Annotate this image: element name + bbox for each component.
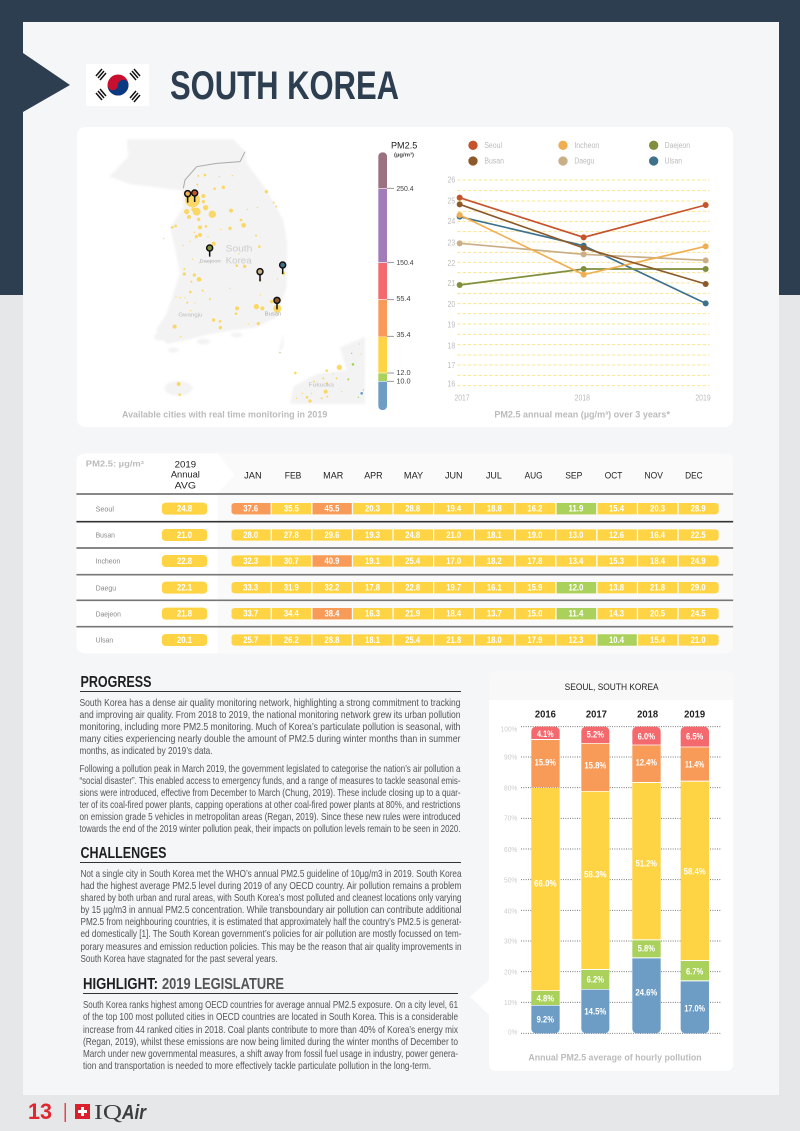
table header: JUL [486,471,502,481]
line chart: PM2.5 annual mean: 20 [447,300,456,309]
table header: 2019 [175,460,196,470]
row: Daegu: 15.9 [527,584,543,593]
text: challenges: had the highest average PM2.5 level during 2019 of any OECD country. Air pollution remains a problem [80,881,462,892]
text: progress: “social disaster”. This enabled access to emergency funds, and a range of measures to tackle seasonal emis- [80,776,460,787]
row: Incheon [96,555,719,567]
text: challenges: PM2.5 from neighbouring countries, it is estimated that approximately half the country’s PM2.5 is generat- [80,917,462,928]
row: Ulsan: 20.1 [177,636,192,646]
table header: JAN [244,471,262,481]
row: Busan: 24.8 [405,531,420,541]
text: challenges: by 15 µg/m3 in annual PM2.5 concentration. While transboundary air pollution can contribute additional [80,905,462,916]
row: Incheon: 40.9 [324,557,340,567]
chart legend: Busan [484,157,504,166]
chart legend: Daejeon [665,141,690,150]
row: Busan: 28.0 [243,531,258,541]
footer: page number and logo: IQ [94,1100,122,1124]
row: Ulsan: 21.0 [691,636,706,646]
panel: Seoul stacked bar chart: 20% [504,968,517,977]
row: Seoul: 37.6 [243,505,258,514]
text: highlight: South Korea ranks highest among OECD countries for average annual PM2.5 exposure. On a city level, 61 [83,1000,458,1011]
bar: 2019: 17.0% [684,1003,705,1013]
text: progress: months, as indicated by 2019’s data. [80,746,212,757]
bar: 2019: 6.7% [686,966,703,976]
text: progress: many cities experiencing nearly double the amount of PM2.5 during winter months than in summer [80,734,461,745]
bar: 2016 [531,710,560,1033]
table header: JUN [445,471,462,481]
text: challenges: porary measures and emission reduction policies. This may be the reason that air quality improvements in [80,942,462,953]
row: Daegu [96,582,719,594]
series: Ulsan [457,214,709,306]
row: Busan: 12.6 [609,531,624,541]
heading: highlight: HIGHLIGHT: [83,976,158,993]
row: Daejeon: 21.8 [177,610,192,619]
bar: 2018: 24.6% [635,988,657,998]
row: Daegu: 22.1 [177,584,192,593]
map of South Korea: South [226,244,252,254]
map of South Korea: Daejeon [200,259,221,265]
row: Daegu: 22.8 [405,584,420,593]
row: Daejeon: 18.4 [446,610,461,619]
row: Ulsan: 12.3 [568,636,584,646]
row: Daejeon: 38.4 [324,610,340,619]
bar: 2019: 2019 [684,710,706,721]
row: Incheon: 19.1 [365,557,380,567]
panel: Seoul stacked bar chart: 90% [504,753,517,762]
bar: 2017: 15.8% [584,761,606,771]
row: Ulsan: 18.0 [487,636,502,646]
bar: 2016: 66.0% [534,879,557,889]
row: Seoul: 15.4 [609,505,624,514]
PM2.5 colour scale: 250.4 [396,184,414,193]
chart legend: Incheon [574,141,599,150]
heading: highlight: 2019 LEGISLATURE [162,976,284,993]
table header: PM2.5: µg/m³ [86,460,144,469]
panel: Seoul stacked bar chart: Annual PM2.5 average of hourly pollution [528,1053,702,1063]
row: Incheon: 32.3 [243,557,258,567]
row: Daegu: 17.8 [365,584,380,593]
series: Daegu [457,240,709,263]
PM2.5 colour scale: PM2.5 [391,140,417,150]
table header: MAR [323,471,343,481]
text: challenges: South Korea have stagnated for the past several years. [80,954,278,965]
chart legend: Daegu [574,157,594,166]
text: highlight: increase from 44 ranked cities in 2018. Coal plants contribute to more than 40% of Korea’s energy mix [83,1025,458,1036]
row: Busan [96,529,719,541]
map of South Korea: Busan [265,312,281,318]
row: Incheon: 30.7 [284,557,299,567]
panel: Seoul stacked bar chart: 40% [504,906,517,915]
row: Busan: 13.0 [568,531,584,541]
row: Seoul: 16.2 [527,505,543,514]
line chart: PM2.5 annual mean: 25 [447,197,456,206]
bar: 2019 [681,710,709,1033]
row: Seoul: 28.8 [405,505,420,514]
panel: Seoul stacked bar chart: SEOUL, SOUTH KOREA [565,682,659,692]
row: Busan: 27.8 [284,531,299,541]
panel: Seoul stacked bar chart: 80% [504,784,517,793]
panel: Seoul stacked bar chart: 70% [504,814,517,823]
bar: 2018: 2018 [637,710,659,721]
line chart: PM2.5 annual mean: 24 [447,217,456,226]
table header: Annual [171,471,200,480]
row: Daegu: 33.3 [243,584,258,593]
text: progress: Following a pollution peak in March 2019, the government legislated to categorise the nation’s air pollution a [80,764,461,775]
row: Daejeon [96,608,719,620]
row: Seoul: 28.9 [691,505,706,514]
text: progress: monitoring, including more PM2.5 monitoring. Much of Korea’s particulate pollution is seasonal, with [80,722,460,733]
map of South Korea: Available cities with real time monitoring in 2019 [122,410,327,420]
row: Daegu: 12.0 [568,584,584,593]
row: Ulsan: 17.9 [527,636,543,646]
bar: 2016: 4.1% [537,729,554,739]
row: Daegu: 19.7 [446,584,461,593]
text: progress: towards the end of the 2019 winter pollution peak, their impacts on pollution levels remain to be seen in 2020. [80,824,460,835]
text: highlight: tion and transportation is needed to more effectively tackle particulate pollution in the long-term. [83,1061,431,1072]
bar: 2017: 5.2% [587,729,604,739]
panel: Seoul stacked bar chart: 10% [504,998,517,1007]
bar: 2018: 12.4% [636,757,657,767]
table header: NOV [645,471,663,481]
line chart: PM2.5 annual mean: 23 [447,239,456,248]
row: Busan: 18.1 [487,531,502,541]
bar: 2017: 58.3% [584,869,607,879]
table header [86,460,703,491]
bar: 2019: 11.4% [685,759,704,769]
title: SOUTH KOREA [170,64,399,108]
text: highlight [83,1000,458,1072]
bar: 2018 [632,710,661,1033]
row: Ulsan: 10.4 [609,636,624,646]
table header: OCT [605,471,623,481]
PM2.5 colour scale: 12.0 [396,368,411,377]
line chart: PM2.5 annual mean: 19 [447,321,456,330]
icon: South Korea flag [86,64,149,106]
heading: highlight [83,976,458,994]
heading: progress: PROGRESS [80,674,152,691]
row: Seoul: 20.3 [365,505,380,514]
row: Busan: 19.0 [527,531,543,541]
panel: map and line chart [77,127,733,427]
PM2.5 colour scale: 35.4 [396,330,411,339]
row: Daejeon: 20.5 [650,610,665,619]
line chart: PM2.5 annual mean: 2017 [454,394,470,403]
row: Incheon: 25.4 [405,557,420,567]
panel: Seoul stacked bar chart: 60% [504,845,517,854]
text: challenges: Not a single city in South Korea met the WHO’s annual PM2.5 guideline of 10µg/m3 in 2019. South Korea [80,869,462,880]
PM2.5 colour scale [378,140,417,410]
footer: page number and logo: 13 [28,1099,52,1124]
footer: page number and logo [28,1099,147,1124]
bar: 2017: 2017 [586,710,607,721]
bar: 2019: 58.4% [684,867,706,877]
text: challenges: ed domestically [1]. The South Korean government’s policies for air pollution are mostly focussed on tem- [80,929,462,940]
row: Daejeon: 24.5 [691,610,706,619]
panel: Seoul stacked bar chart [470,671,733,1071]
row: Busan: 29.6 [324,531,340,541]
series: Busan [457,201,709,287]
row: Seoul: 45.5 [324,505,340,514]
map of South Korea [109,139,365,420]
table header: DEC [685,471,703,481]
row: Daegu: Daegu [96,583,116,592]
map pins [185,190,286,309]
row: Daegu: 29.0 [691,584,706,593]
row: Daejeon: 16.3 [365,610,380,619]
text: highlight: (Regan, 2019), whilst these emissions are now being limited during the winter months of December to [83,1037,458,1048]
row: Incheon: Incheon [96,557,121,565]
row: Ulsan: 21.8 [446,636,461,646]
table header: AUG [525,471,543,481]
text: highlight: March under new governmental measures, a shift away from fossil fuel usage in industry, power genera- [83,1049,458,1060]
chart legend [468,141,690,166]
row: Ulsan [96,634,719,646]
row: Daejeon: 15.0 [527,610,543,619]
text: progress: South Korea has a dense air quality monitoring network, highlighting a strong commitment to tracking [80,698,461,709]
line chart: PM2.5 annual mean: 2019 [695,394,711,403]
text: challenges [80,869,462,965]
line chart: PM2.5 annual mean [447,141,711,419]
row: Daegu: 16.1 [487,584,502,593]
row: Busan: 21.0 [446,531,461,541]
bar: 2016: 2016 [535,710,556,721]
row: Incheon: 17.8 [527,557,543,567]
row: Busan: 22.5 [691,531,706,541]
row: Incheon: 15.3 [609,557,624,567]
row: Incheon: 24.9 [691,557,706,567]
row: Incheon: 17.0 [446,557,461,567]
text: highlight: of the top 100 most polluted cities in OECD countries are located in South Korea. This is a considerable [83,1012,458,1023]
row: Busan: 21.0 [177,531,192,541]
heading: challenges: CHALLENGES [80,845,166,862]
bar: 2017: 6.2% [587,974,604,984]
row: Seoul [96,503,719,515]
line chart: PM2.5 annual mean: 2018 [575,394,590,403]
map of South Korea: Korea [226,256,252,266]
map of South Korea: Gwangju [178,313,202,319]
row: Seoul: 19.4 [446,505,461,514]
bar: 2017 [581,710,609,1033]
text: progress: sions were introduced, effective from December to March (Chung, 2019). These include closing up to a quar- [80,788,460,799]
row: Daejeon: 34.4 [284,610,299,619]
row: Daejeon: 14.3 [609,610,624,619]
line chart: PM2.5 annual mean: PM2.5 annual mean (µg/m³) over 3 years* [494,409,670,419]
row: Ulsan: 26.2 [284,636,299,646]
line chart: PM2.5 annual mean: 18 [447,341,456,350]
row: Seoul: Seoul [96,504,114,513]
series: Seoul [457,195,709,240]
line chart: PM2.5 annual mean: 21 [447,279,456,288]
row: Daejeon: Daejeon [96,610,121,618]
row: Busan: 19.3 [365,531,380,541]
text: challenges: shared by both urban and rural areas, with South Korea’s most polluted and cleanest locations only varying [80,893,462,904]
header arrow [23,53,70,112]
bar: 2018: 51.2% [636,859,657,869]
line chart: PM2.5 annual mean: 17 [447,361,456,370]
row: Incheon: 22.8 [177,557,192,567]
text: progress: and improving air quality. From 2018 to 2019, the national monitoring network grew its urban pollution [80,710,460,721]
row: Ulsan: Ulsan [96,636,113,644]
row: Daegu: 32.2 [324,584,340,593]
table: monthly PM2.5 by city [76,453,733,653]
PM2.5 colour scale: 10.0 [396,377,411,386]
row: Daejeon: 13.7 [487,610,502,619]
line chart: PM2.5 annual mean: 22 [447,259,456,268]
row: Ulsan: 15.4 [650,636,665,646]
row: Ulsan: 28.8 [324,636,340,646]
bar: 2016: 15.9% [535,758,556,768]
bar: 2016: 9.2% [537,1015,554,1025]
line chart: PM2.5 annual mean: 26 [447,176,456,185]
table header: AVG [175,481,196,491]
text: progress: ter of its coal-fired power plants, capping operations at other coal-fired power plants at 80%, and restrictions [80,800,460,811]
row: Busan: 16.4 [650,531,665,541]
row: Ulsan: 25.4 [405,636,420,646]
PM2.5 colour scale: 55.4 [396,294,411,303]
row: Incheon: 18.2 [487,557,502,567]
row: Busan: Busan [96,531,115,539]
series: Incheon [457,212,709,278]
bar: 2016: 4.8% [537,993,554,1003]
chart legend: Seoul [484,141,502,150]
bar: 2019: 6.5% [686,732,703,742]
row: Seoul: 24.8 [177,505,192,514]
table header: MAY [404,471,423,481]
row: Incheon: 13.4 [568,557,584,567]
bar: 2017: 14.5% [584,1007,606,1017]
row: Ulsan: 25.7 [243,636,258,646]
series: Daejeon [457,266,709,288]
row: Seoul: 18.8 [487,505,502,514]
row: Ulsan: 18.1 [365,636,380,646]
panel: Seoul stacked bar chart: 0% [508,1028,517,1037]
row: Daejeon: 21.9 [405,610,420,619]
panel: Seoul stacked bar chart: 50% [504,876,517,885]
map of South Korea: Fukuoka [309,383,335,389]
row: Seoul: 20.3 [650,505,665,514]
row: Seoul: 35.5 [284,505,299,514]
row: Daegu: 21.8 [650,584,665,593]
PM2.5 colour scale: (µg/m³) [394,153,414,159]
chart legend: Ulsan [665,157,682,166]
row: Incheon: 18.4 [650,557,665,567]
panel: Seoul stacked bar chart: 100% [501,724,517,733]
bar: 2018: 6.0% [638,732,655,742]
row: Daejeon: 33.7 [243,610,258,619]
row: Daegu: 31.9 [284,584,299,593]
PM2.5 colour scale: 150.4 [396,258,414,267]
line chart: PM2.5 annual mean: 16 [447,380,456,389]
text: progress: on emission grade 5 vehicles in metropolitan areas (Regan, 2019). Since these new rules were introduced [80,812,461,823]
table header: SEP [565,471,582,481]
row: Daegu: 13.8 [609,584,624,593]
row: Daejeon: 11.4 [568,610,584,619]
table header: FEB [285,471,301,481]
row: Seoul: 11.9 [568,505,584,514]
panel: Seoul stacked bar chart: 30% [504,937,517,946]
text: progress [80,698,461,835]
bar: 2018: 5.8% [638,944,655,954]
table header: APR [364,471,383,481]
footer: page number and logo: Air [121,1102,147,1124]
